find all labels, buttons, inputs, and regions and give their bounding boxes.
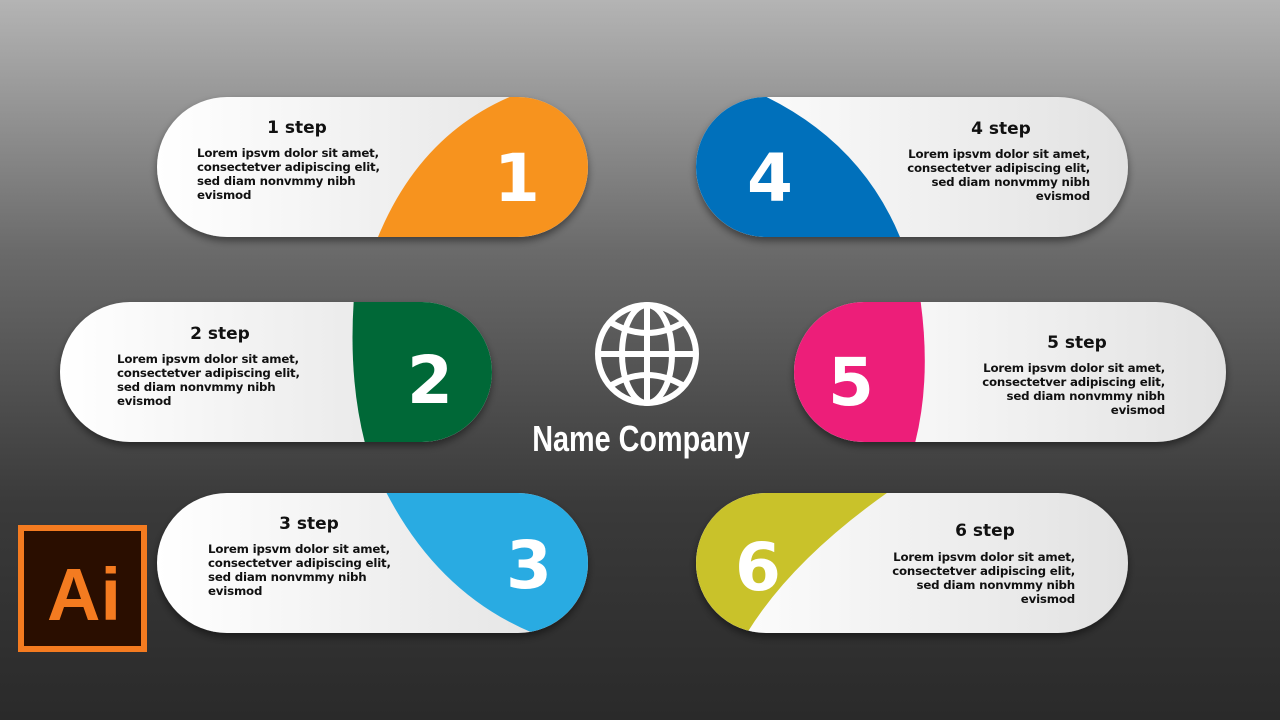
text block: step 5: consectetver adipiscing elit, bbox=[982, 375, 1165, 389]
panel: step 4 bbox=[690, 92, 1128, 242]
number 6: 6 bbox=[735, 529, 781, 606]
shape: olive segment bbox=[696, 493, 887, 631]
heading: 6 step: 6 step bbox=[955, 521, 1015, 541]
logo: Adobe Illustrator: Ai bbox=[47, 553, 121, 636]
text block: step 4: Lorem ipsvm dolor sit amet, bbox=[908, 147, 1090, 161]
text block: step 3: consectetver adipiscing elit, bbox=[208, 556, 391, 570]
text block: step 1: Lorem ipsvm dolor sit amet, bbox=[197, 146, 379, 160]
text block: step 4: evismod bbox=[1036, 189, 1090, 203]
number 5: 5 bbox=[828, 344, 874, 421]
shape: green segment bbox=[352, 302, 492, 442]
title: Name Company: Name Company bbox=[532, 418, 750, 459]
text block: step 1: consectetver adipiscing elit, bbox=[197, 160, 380, 174]
shape: blue segment bbox=[696, 97, 900, 237]
text block: step 1: sed diam nonvmmy nibh bbox=[197, 174, 355, 188]
heading: 5 step: 5 step bbox=[1047, 333, 1107, 353]
panel: step 6 bbox=[690, 488, 1128, 638]
text block: step 6: evismod bbox=[1021, 592, 1075, 606]
heading: 3 step: 3 step bbox=[279, 514, 339, 534]
number 4: 4 bbox=[747, 140, 793, 217]
panel: step 5 bbox=[788, 297, 1226, 447]
number 1: 1 bbox=[494, 140, 540, 217]
heading: 4 step: 4 step bbox=[971, 119, 1031, 139]
shape: orange segment bbox=[378, 97, 588, 237]
text block: step 3: evismod bbox=[208, 584, 262, 598]
text block: step 5: sed diam nonvmmy nibh bbox=[1007, 389, 1165, 403]
text block: step 6: Lorem ipsvm dolor sit amet, bbox=[893, 550, 1075, 564]
logo: Adobe Illustrator bbox=[21, 528, 144, 649]
text block: step 4: sed diam nonvmmy nibh bbox=[932, 175, 1090, 189]
shape: light blue segment bbox=[386, 493, 588, 632]
text block: step 4: consectetver adipiscing elit, bbox=[907, 161, 1090, 175]
panel: step 3 bbox=[157, 488, 600, 638]
icon: globe bbox=[598, 305, 696, 403]
heading: 2 step: 2 step bbox=[190, 324, 250, 344]
heading: 1 step: 1 step bbox=[267, 118, 327, 138]
text block: step 2: sed diam nonvmmy nibh bbox=[117, 380, 275, 394]
text block: step 2: Lorem ipsvm dolor sit amet, bbox=[117, 352, 299, 366]
text block: step 6: consectetver adipiscing elit, bbox=[892, 564, 1075, 578]
text block: step 5: Lorem ipsvm dolor sit amet, bbox=[983, 361, 1165, 375]
text block: step 5: evismod bbox=[1111, 403, 1165, 417]
text block: step 3: sed diam nonvmmy nibh bbox=[208, 570, 366, 584]
text block: step 2: evismod bbox=[117, 394, 171, 408]
panel: step 1 bbox=[157, 92, 600, 242]
number 2: 2 bbox=[407, 342, 453, 419]
text block: step 1: evismod bbox=[197, 188, 251, 202]
text block: step 2: consectetver adipiscing elit, bbox=[117, 366, 300, 380]
panel: step 2 bbox=[60, 297, 500, 447]
text block: step 3: Lorem ipsvm dolor sit amet, bbox=[208, 542, 390, 556]
number 3: 3 bbox=[506, 527, 552, 604]
text block: step 6: sed diam nonvmmy nibh bbox=[917, 578, 1075, 592]
shape: pink segment bbox=[794, 302, 925, 442]
